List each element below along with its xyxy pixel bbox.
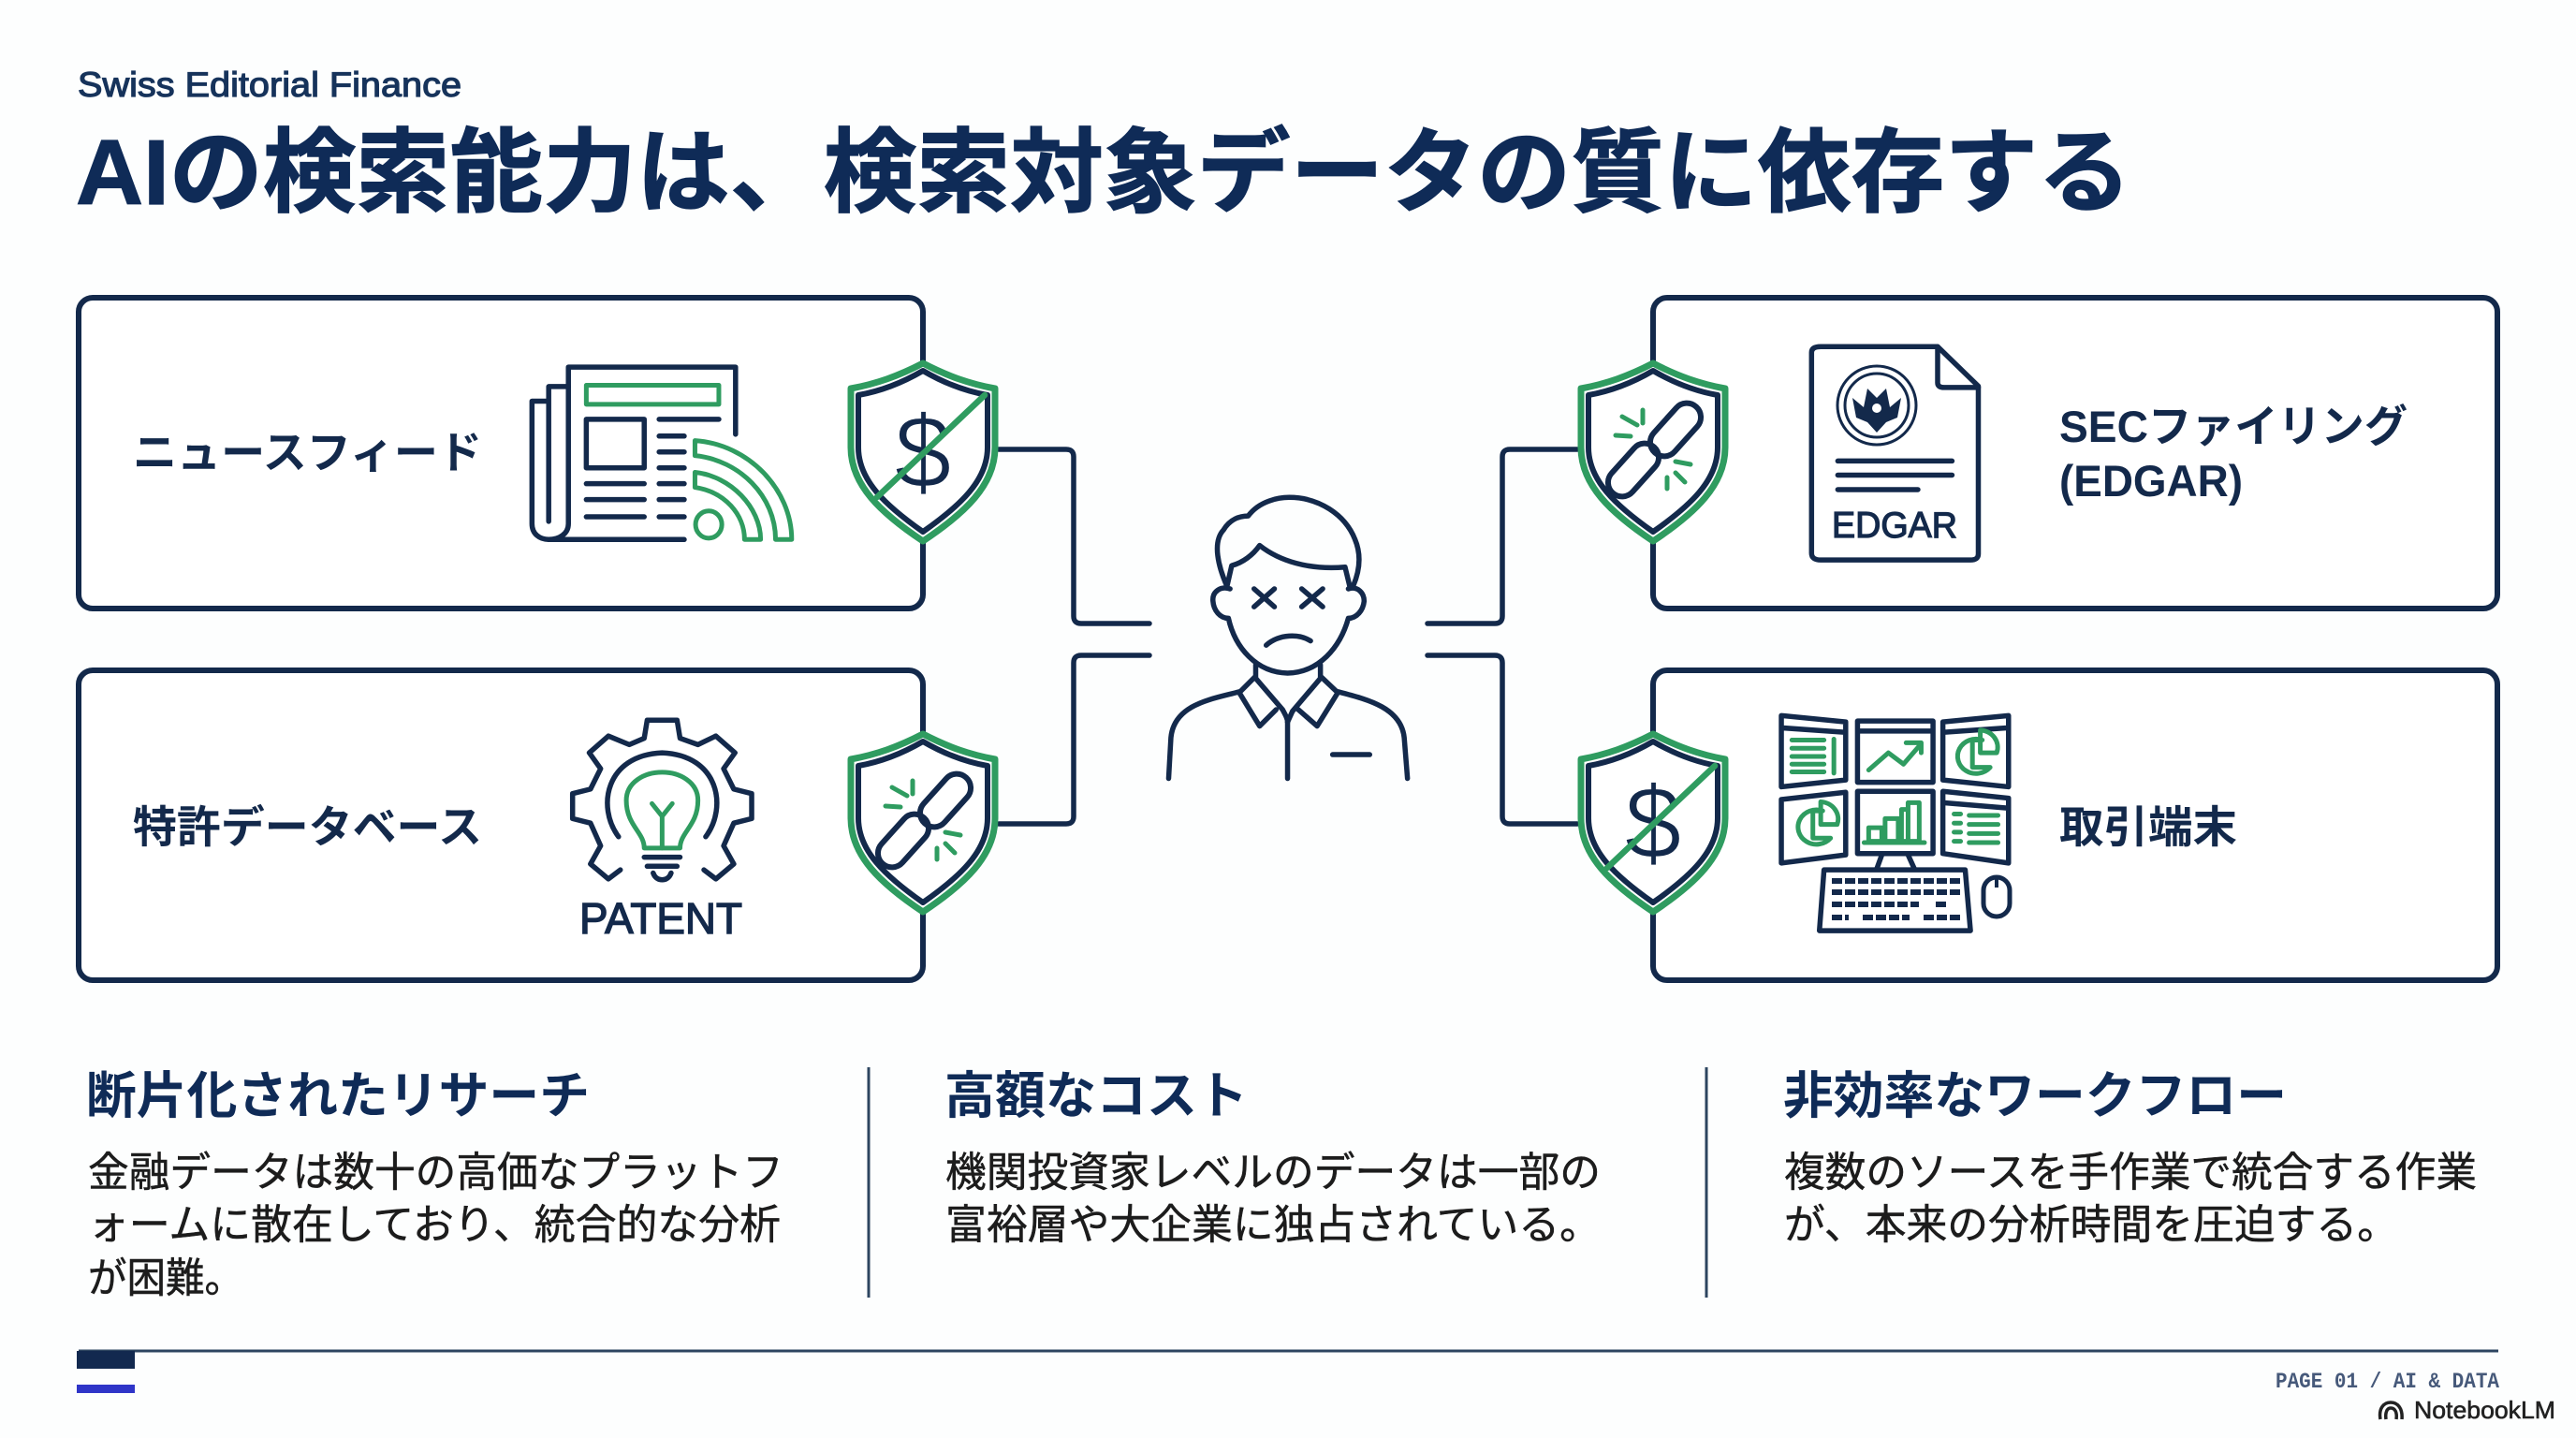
panel: news feed — [79, 298, 995, 609]
text block: fragmented research: ォームに散在しており、統合的な分析 — [88, 1202, 781, 1248]
text block: inefficient workflow: 非効率なワークフロー — [1783, 1068, 2287, 1124]
icon: multi-monitor trading terminal — [1781, 715, 2010, 931]
text block: fragmented research — [86, 1068, 783, 1301]
icon: EDGAR document with seal — [1811, 346, 1978, 560]
connectors from shields to person — [999, 449, 1577, 824]
panel: patent database — [79, 670, 995, 980]
panel: SEC filing — [1581, 298, 2497, 609]
label: SEC filing: SECファイリング — [2059, 402, 2408, 451]
icon: NotebookLM logo — [2380, 1402, 2402, 1419]
label: trading terminal: 取引端末 — [2059, 802, 2237, 852]
footer page label: PAGE 01 / AI & DATA — [2276, 1370, 2499, 1394]
label: EDGAR: (EDGAR) — [2059, 456, 2243, 506]
footer accent bars — [77, 1351, 135, 1393]
text block: inefficient workflow: 複数のソースを手作業で統合する作業 — [1784, 1150, 2477, 1196]
text block: fragmented research: が困難。 — [88, 1255, 243, 1301]
text block: high cost: 富裕層や大企業に独占されている。 — [945, 1202, 1601, 1248]
icon: shield with crossed dollar: $ — [1624, 766, 1682, 881]
icon: shield with broken link — [851, 734, 995, 912]
title: AIの検索能力は、検索対象データの質に依存する — [76, 121, 2131, 224]
icon: shield with broken link — [1581, 363, 1725, 541]
icon: shield with crossed dollar: $ — [894, 395, 952, 510]
label: patent database: 特許データベース — [133, 802, 482, 852]
icon: newspaper with RSS — [532, 367, 792, 539]
icon: gear with light bulb — [573, 720, 752, 880]
text block: high cost: 機関投資家レベルのデータは一部の — [945, 1150, 1601, 1196]
text block: fragmented research: 断片化されたリサーチ — [86, 1068, 590, 1124]
panel: trading terminal — [1581, 670, 2497, 980]
icon: shield with crossed dollar — [851, 363, 995, 541]
icon label: PATENT: PATENT — [579, 894, 742, 943]
icon: shield with crossed dollar — [1581, 734, 1725, 912]
text block: inefficient workflow — [1783, 1068, 2477, 1248]
icon: EDGAR document with seal: EDGAR — [1832, 506, 1957, 546]
eyebrow: Swiss Editorial Finance: Swiss Editorial Finance — [78, 66, 461, 104]
text block: fragmented research: 金融データは数十の高価なプラットフ — [88, 1150, 783, 1196]
text block: inefficient workflow: が、本来の分析時間を圧迫する。 — [1784, 1202, 2398, 1248]
text block: high cost: 高額なコスト — [944, 1068, 1248, 1124]
icon: confused person — [1168, 497, 1408, 779]
label: news feed: ニュースフィード — [133, 428, 482, 477]
watermark: NotebookLM: NotebookLM — [2414, 1396, 2555, 1424]
text block: high cost — [944, 1068, 1601, 1248]
